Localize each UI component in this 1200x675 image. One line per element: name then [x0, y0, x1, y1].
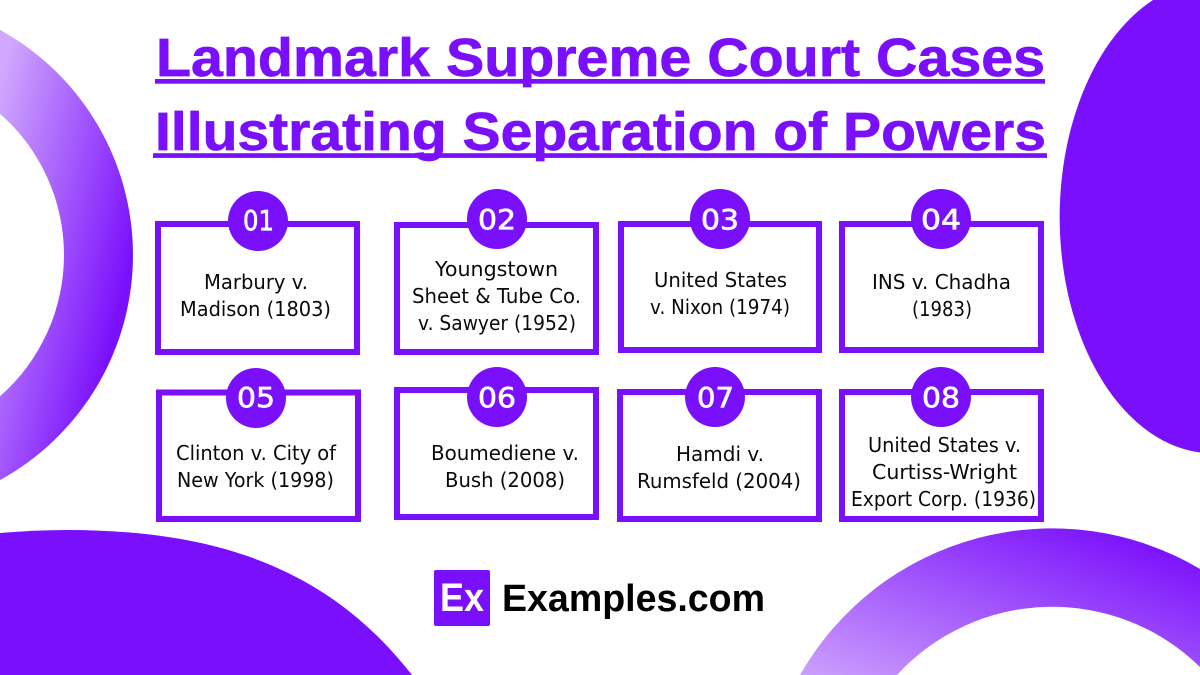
case card 08: Curtiss-Wright	[872, 460, 1017, 484]
case card 08: 08	[922, 381, 960, 414]
case card 04: INS v. Chadha	[872, 270, 1011, 294]
case card 01: 01	[243, 204, 274, 237]
logo: Examples.com	[434, 570, 765, 626]
case card 05	[159, 368, 358, 519]
case card 05: 05	[237, 381, 275, 414]
title: Illustrating Separation of Powers	[155, 102, 1046, 162]
case card 03: United States	[654, 268, 787, 292]
decorative blob: top right	[1060, 0, 1200, 452]
decorative ring: left	[0, 30, 133, 480]
case card 01: Marbury v.	[204, 270, 308, 294]
case card 06: 06	[478, 381, 516, 414]
decorative ring: bottom right	[800, 528, 1200, 675]
case card 02: Youngstown	[434, 257, 558, 281]
case card 02: Sheet & Tube Co.	[412, 284, 581, 308]
case card 07: Rumsfeld (2004)	[637, 469, 801, 493]
case card 04: (1983)	[912, 297, 972, 321]
case card 07	[620, 367, 819, 519]
case card 08	[842, 367, 1041, 519]
case card 02: v. Sawyer (1952)	[418, 311, 576, 335]
case card 05: New York (1998)	[177, 468, 334, 492]
case card 06: Bush (2008)	[445, 468, 565, 492]
case card 01: Madison (1803)	[180, 297, 331, 321]
case card 04: 04	[921, 203, 961, 236]
title: Landmark Supreme Court Cases	[156, 28, 1045, 88]
decorative blob: bottom left	[0, 530, 412, 675]
logo: Examples.com: Examples.com	[502, 578, 765, 620]
case card 07: 07	[697, 381, 734, 414]
case card 04	[842, 189, 1041, 350]
case card 03	[621, 189, 819, 350]
case card 05: Clinton v. City of	[176, 441, 337, 465]
case card 06	[397, 367, 596, 517]
case card 06: Boumediene v.	[431, 441, 579, 465]
title	[153, 28, 1047, 162]
case card 02	[397, 189, 596, 352]
case card 03: 03	[701, 203, 739, 236]
case card 08: United States v.	[868, 433, 1021, 457]
case card 03: v. Nixon (1974)	[650, 295, 790, 319]
case card 02: 02	[478, 203, 516, 236]
logo: Examples.com: Ex	[440, 576, 484, 620]
case card 08: Export Corp. (1936)	[851, 487, 1036, 511]
case card 07: Hamdi v.	[676, 442, 764, 466]
case card 01	[158, 191, 357, 352]
